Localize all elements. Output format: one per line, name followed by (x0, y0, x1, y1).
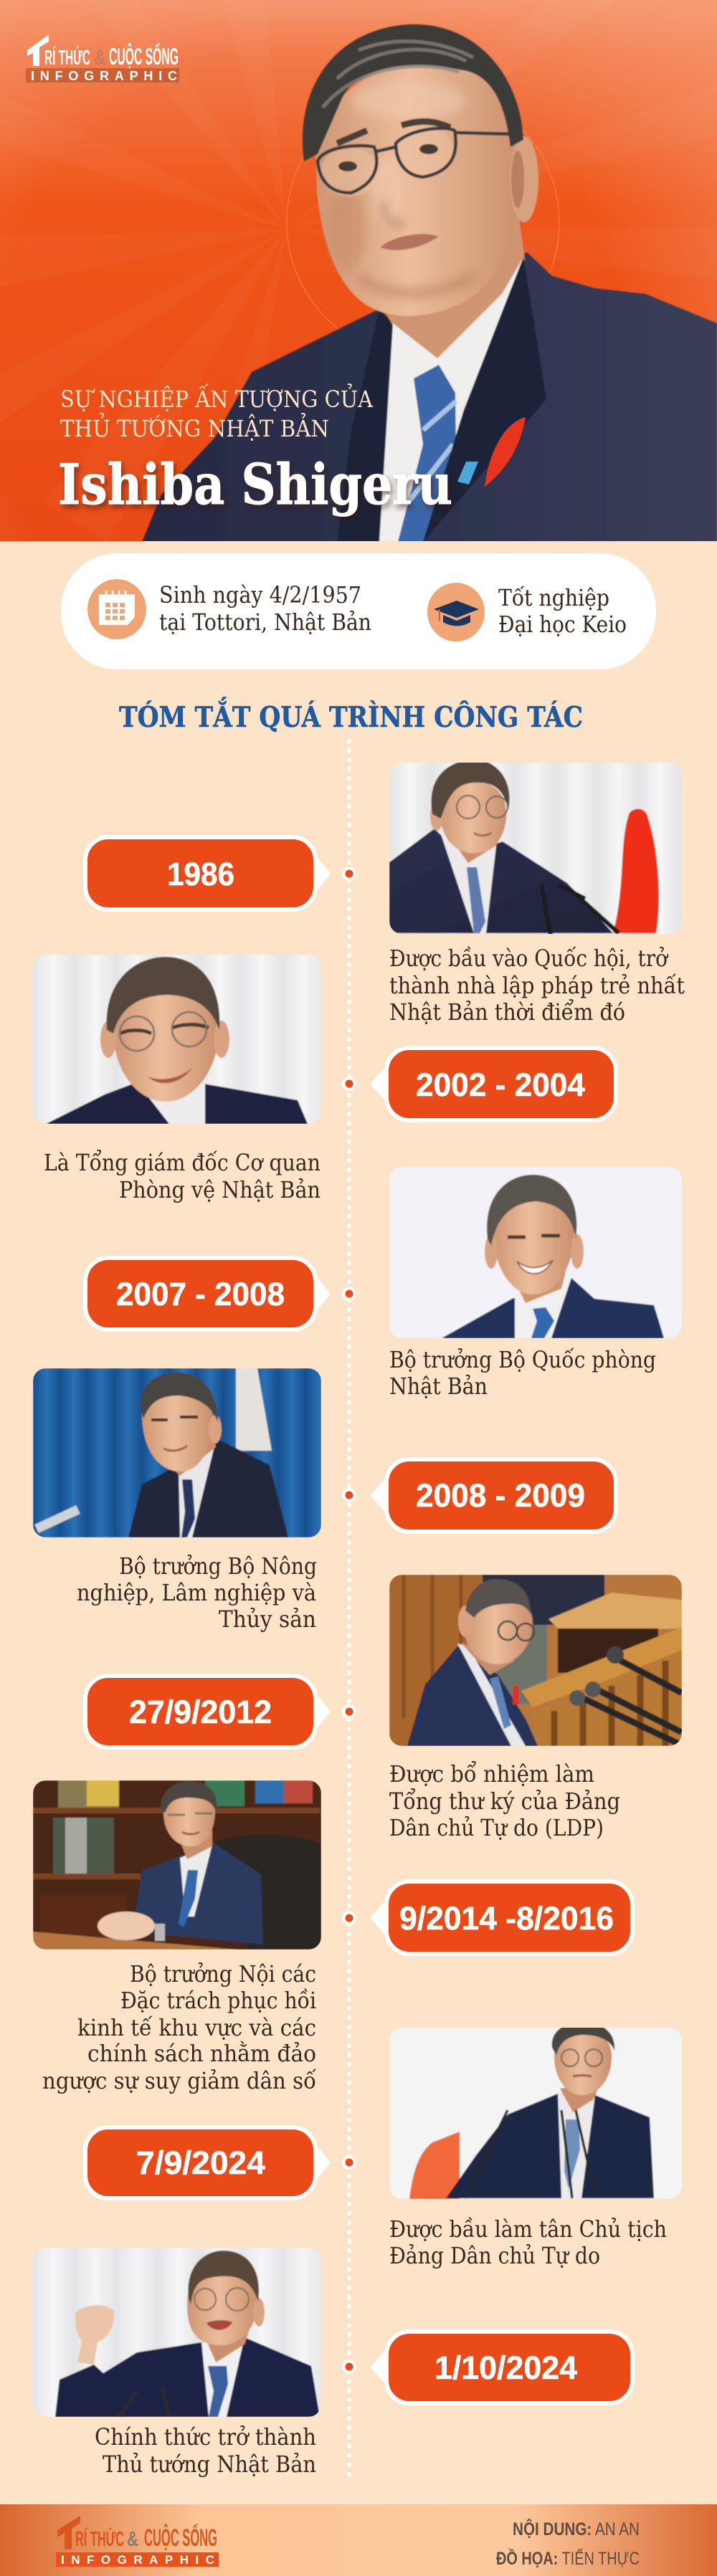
caption 2008-2009: Bộ trưởng Bộ Nông (119, 1552, 317, 1580)
caption 9/2014-8/2016: Đặc trách phục hồi (120, 1987, 316, 2014)
photo 27/9/2012 (389, 1575, 682, 1746)
caption 1986: Được bầu vào Quốc hội, trở (389, 945, 669, 972)
timeline 27/9/2012 (85, 1676, 356, 1747)
caption 1/10/2024 (95, 2423, 316, 2478)
blue ribbon pin (457, 462, 478, 485)
caption 2008-2009: nghiệp, Lâm nghiệp và (77, 1579, 316, 1606)
caption 2002-2004: Là Tổng giám đốc Cơ quan (44, 1149, 320, 1176)
photo 9/2014-8/2016 (33, 1780, 321, 1950)
timeline 7/9/2024 (85, 2127, 356, 2198)
timeline 9/2014-8/2016: 9/2014 -8/2016 (399, 1900, 614, 1937)
timeline 7/9/2024: 7/9/2024 (136, 2145, 265, 2181)
caption 1/10/2024: Chính thức trở thành (95, 2423, 316, 2451)
caption 7/9/2024: Đảng Dân chủ Tự do (389, 2242, 600, 2269)
caption 9/2014-8/2016: Bộ trưởng Nội các (130, 1960, 316, 1988)
hero title: THỦ TƯỚNG NHẬT BẢN (60, 413, 329, 442)
photo 1/10/2024 (33, 2248, 321, 2417)
timeline 2007-2008: 2007 - 2008 (116, 1276, 285, 1312)
caption 9/2014-8/2016: chính sách nhằm đảo (87, 2040, 316, 2067)
timeline 9/2014-8/2016 (342, 1881, 632, 1954)
photo 2007-2008 (389, 1167, 682, 1338)
timeline 1986: 1986 (167, 856, 234, 892)
caption 27/9/2012 (389, 1760, 620, 1841)
photo 1986 (389, 759, 682, 935)
hero name: Ishiba Shigeru (58, 452, 452, 517)
caption 2007-2008: Bộ trưởng Bộ Quốc phòng (389, 1346, 656, 1373)
hero title (60, 383, 374, 442)
caption 2002-2004 (44, 1149, 320, 1203)
timeline 2002-2004 (342, 1048, 616, 1120)
caption 9/2014-8/2016: kinh tế khu vực và các (77, 2014, 316, 2041)
timeline 2007-2008 (85, 1258, 356, 1330)
timeline 2002-2004: 2002 - 2004 (416, 1067, 585, 1103)
timeline 2008-2009: 2008 - 2009 (416, 1477, 585, 1514)
footer credits: ĐỒ HỌA: TIẾN THỰC (496, 2547, 640, 2569)
caption 1986: Nhật Bản thời điểm đó (389, 998, 625, 1026)
icon: calendar (87, 579, 146, 639)
caption 2008-2009: Thủy sản (219, 1606, 316, 1633)
caption 2002-2004: Phòng vệ Nhật Bản (119, 1176, 320, 1203)
caption 7/9/2024 (389, 2215, 667, 2269)
education text: Tốt nghiệp (498, 584, 609, 611)
education text: Đại học Keio (498, 611, 627, 638)
footer credits (496, 2518, 640, 2569)
hero portrait of Ishiba Shigeru (142, 24, 717, 542)
caption 1986 (389, 945, 685, 1026)
footer logo: & (127, 2528, 138, 2551)
caption 2008-2009 (77, 1552, 317, 1633)
heading: TÓM TẮT QUÁ TRÌNH CÔNG TÁC (119, 697, 583, 734)
hero logo: & (94, 47, 106, 70)
caption 2007-2008 (389, 1346, 656, 1400)
hero banner: CUỘC SỐNG (109, 42, 179, 70)
photo 2008-2009 (33, 1368, 321, 1537)
footer logo (56, 2516, 219, 2567)
timeline 27/9/2012: 27/9/2012 (129, 1694, 272, 1730)
red feather pin (485, 417, 526, 487)
icon: graduation cap (427, 583, 485, 641)
footer credits: NỘI DUNG: AN AN (513, 2518, 640, 2539)
caption 1/10/2024: Thủ tướng Nhật Bản (103, 2451, 316, 2478)
caption 1986: thành nhà lập pháp trẻ nhất (389, 972, 685, 999)
info panel (61, 553, 656, 669)
hero logo: RÍ THỨC (44, 45, 90, 70)
timeline 1/10/2024 (342, 2332, 632, 2403)
education text (498, 584, 627, 638)
footer (0, 2504, 717, 2576)
hero banner (0, 0, 717, 542)
photo 7/9/2024 (389, 2022, 682, 2199)
caption 2007-2008: Nhật Bản (389, 1373, 488, 1400)
footer logo: INFOGRAPHIC (61, 2553, 214, 2567)
timeline 2008-2009 (342, 1459, 616, 1532)
caption 9/2014-8/2016 (42, 1960, 316, 2094)
caption 27/9/2012: Tổng thư ký của Đảng (389, 1788, 620, 1815)
birth text: Sinh ngày 4/2/1957 (159, 581, 361, 609)
timeline 1/10/2024: 1/10/2024 (435, 2350, 577, 2386)
footer logo: RÍ THỨC (75, 2527, 124, 2551)
caption 7/9/2024: Được bầu làm tân Chủ tịch (389, 2215, 667, 2243)
footer: CUỘC SỐNG (144, 2524, 217, 2552)
caption 9/2014-8/2016: ngược sự suy giảm dân số (42, 2067, 316, 2094)
birth text (159, 581, 371, 636)
caption 27/9/2012: Được bổ nhiệm làm (389, 1760, 594, 1788)
caption 27/9/2012: Dân chủ Tự do (LDP) (389, 1814, 604, 1841)
birth text: tại Tottori, Nhật Bản (159, 609, 371, 636)
hero title: SỰ NGHIỆP ẤN TƯỢNG CỦA (60, 383, 374, 413)
timeline 1986 (85, 837, 356, 910)
photo 2002-2004 (33, 955, 321, 1124)
hero logo (26, 34, 179, 83)
hero logo: INFOGRAPHIC (31, 69, 177, 83)
